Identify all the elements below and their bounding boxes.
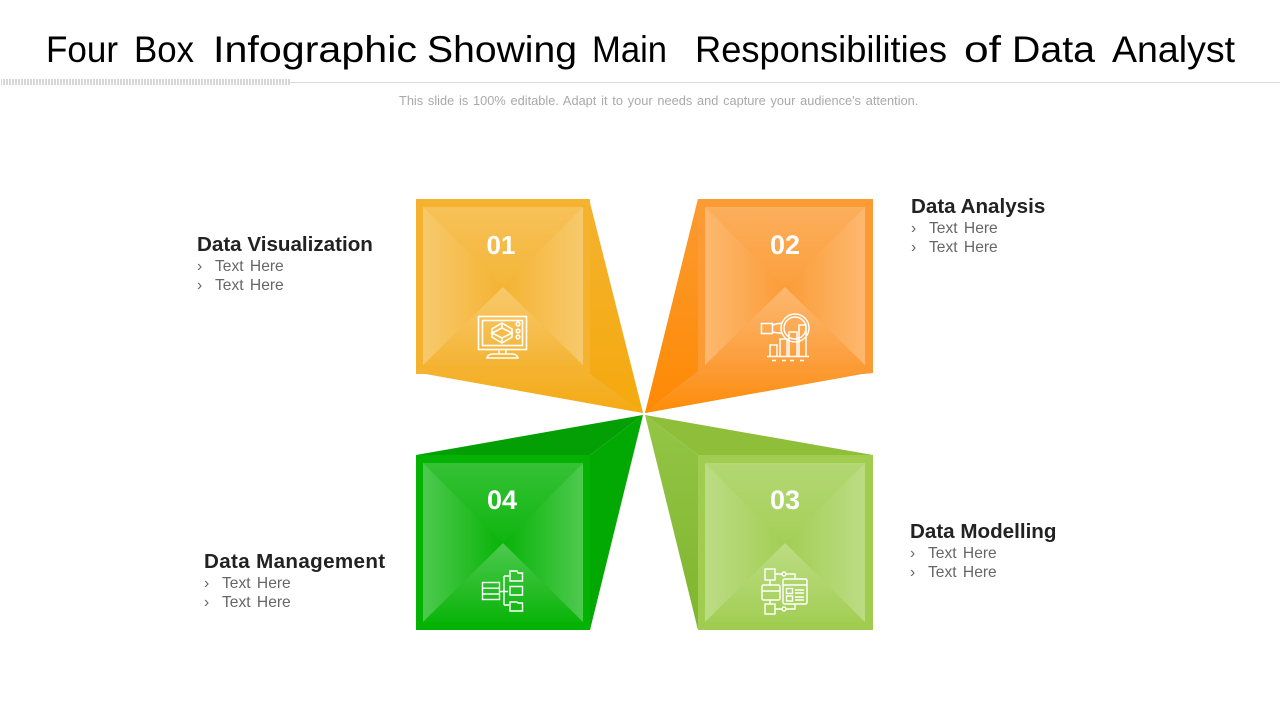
text block: Data Analysis: Text Here [929,220,998,237]
text block: Data Management [204,550,385,611]
text block: Data Management: › [204,575,209,592]
text block: Data Analysis [911,195,1045,256]
text block: Data Analysis: Data Analysis [911,195,1045,218]
panel: box 02 [645,199,873,413]
text block: Data Analysis: › [911,220,916,237]
text block: Data Modelling: Text Here [928,545,997,562]
icon: data model flowchart [762,569,807,614]
text block: Data Visualization [197,233,373,294]
number 01: 01 [487,230,515,260]
icon: monitor with cube [478,316,526,358]
text block: Data Visualization: › [197,277,202,294]
title: Data [1012,29,1095,70]
text block: Data Analysis: Text Here [929,239,998,256]
text block: Data Visualization: Text Here [215,258,284,275]
panel: box 04 [416,415,643,630]
text block: Data Management: Data Management [204,550,385,573]
text block: Data Visualization: › [197,258,202,275]
title: Infographic [213,29,417,70]
text block: Data Management: Text Here [222,575,291,592]
title: Analyst [1112,29,1236,70]
title rule [1,79,1280,85]
text block: Data Visualization: Text Here [215,277,284,294]
title [46,29,1236,70]
text block: Data Management: Text Here [222,594,291,611]
panel: box 01 [416,199,643,413]
title: of [964,29,1002,70]
text block: Data Modelling: › [910,564,915,581]
text block: Data Modelling: Text Here [928,564,997,581]
subtitle: This slide is 100% editable. Adapt it to your needs and capture your audience's attention. [399,93,918,108]
text block: Data Visualization: Data Visualization [197,233,373,256]
number 03: 03 [770,485,800,515]
icon: server with folders [482,571,522,611]
icon: magnifier over bar chart [762,314,809,360]
text block: Data Management: › [204,594,209,611]
text block: Data Modelling: › [910,545,915,562]
title: Main [592,29,667,70]
text block: Data Analysis: › [911,239,916,256]
number 02: 02 [770,230,800,260]
title: Responsibilities [695,29,947,70]
title: Box [134,29,194,70]
title: Showing [427,29,577,70]
panel: box 03 [645,415,873,630]
text block: Data Modelling: Data Modelling [910,520,1056,543]
text block: Data Modelling [910,520,1056,581]
title: Four [46,29,118,70]
number 04: 04 [487,485,517,515]
